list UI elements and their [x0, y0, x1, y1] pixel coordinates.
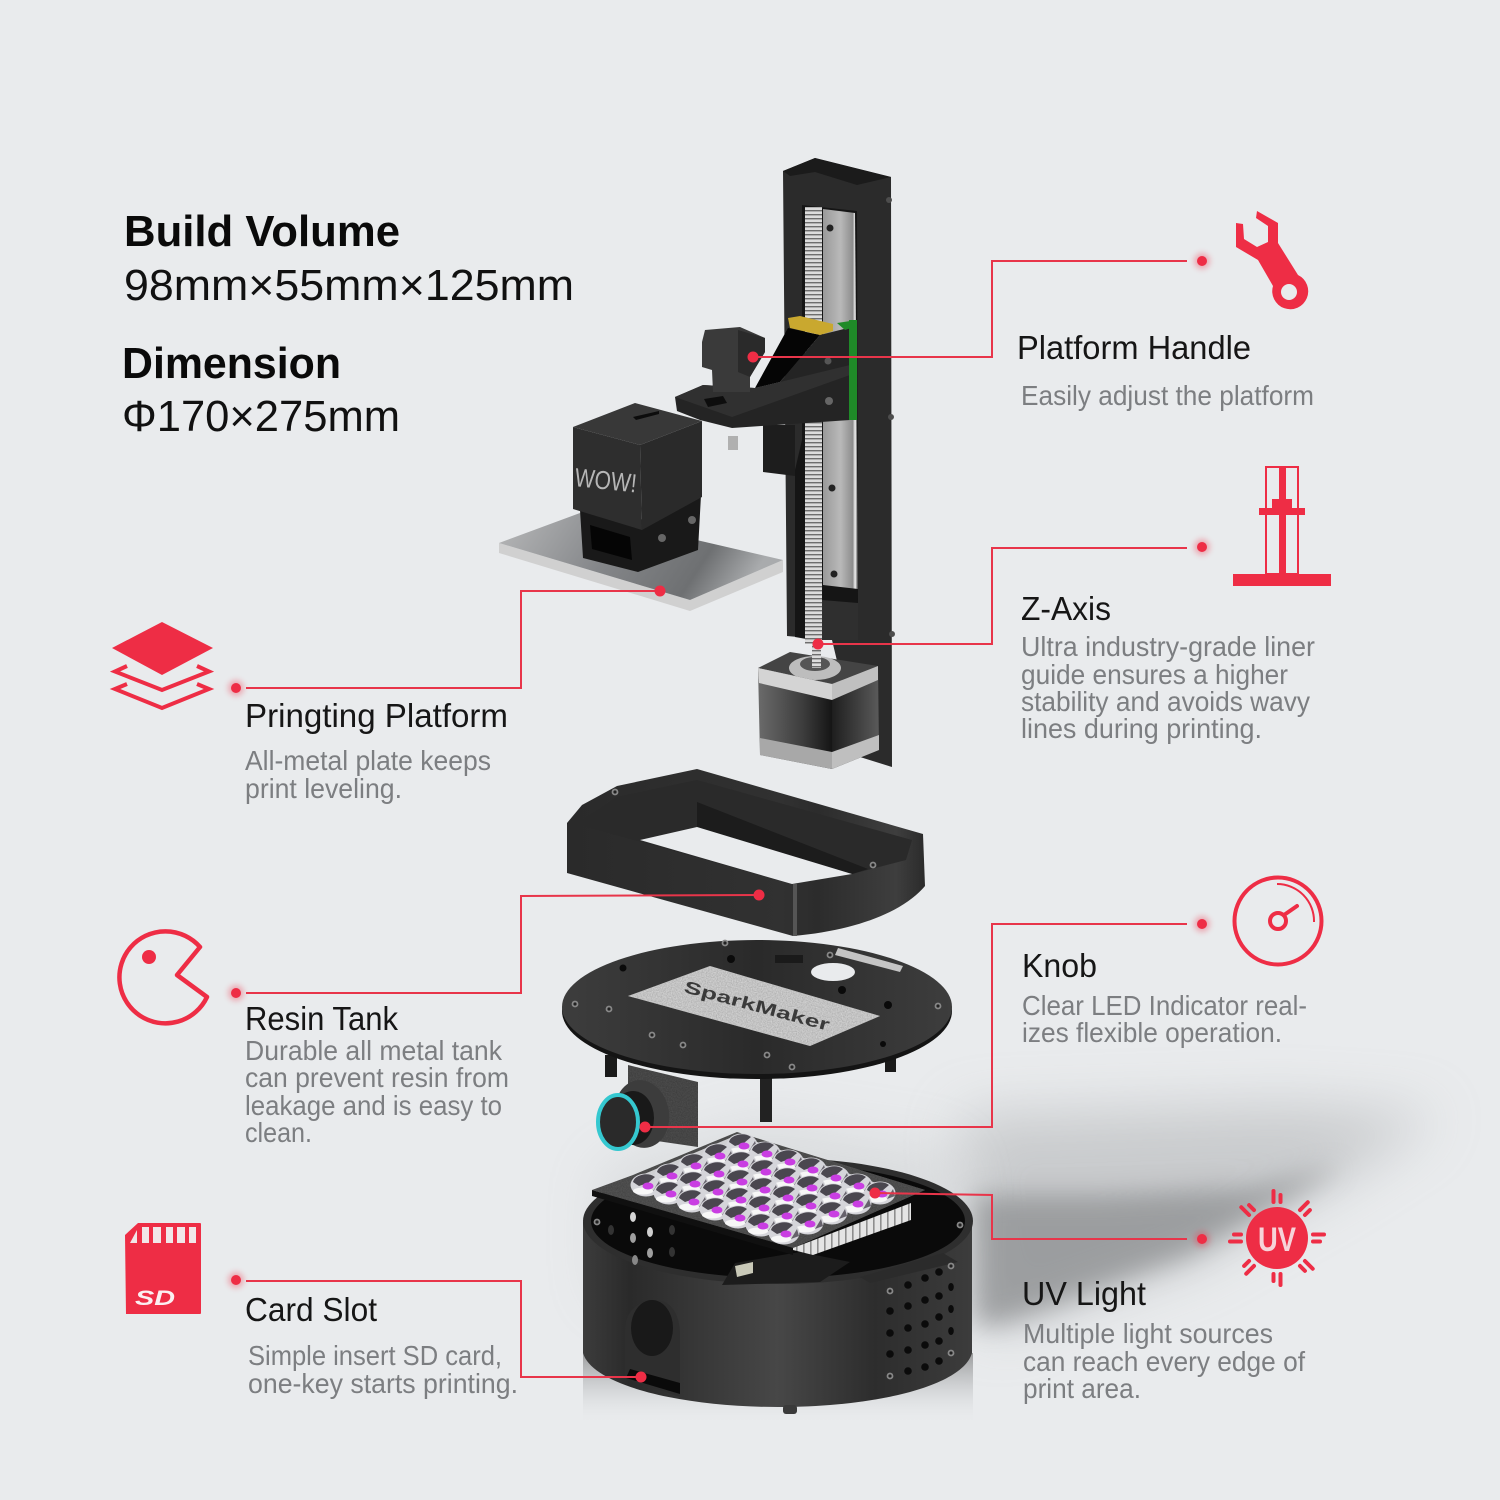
icon: SD card — [125, 1223, 201, 1314]
text: platform handle: Easily adjust the platform — [1021, 380, 1314, 411]
heading: dimension — [122, 339, 400, 441]
text: resin tank: leakage and is easy to — [245, 1090, 502, 1121]
heading: dimension: Φ170×275mm — [122, 392, 400, 441]
WOW box on platform — [573, 403, 702, 572]
text: UV light: Multiple light sources — [1023, 1318, 1273, 1349]
speaker holes on base — [886, 1263, 954, 1379]
text: z-axis — [1021, 590, 1315, 744]
text: z-axis: Z-Axis — [1021, 590, 1111, 627]
text: platform handle — [1017, 329, 1314, 411]
text: card slot: Simple insert SD card, — [248, 1340, 502, 1371]
text: printing platform: Pringting Platform — [245, 697, 508, 734]
base enclosure — [583, 1158, 973, 1414]
heading: build volume — [124, 207, 574, 310]
heading: dimension: Dimension — [122, 339, 341, 388]
icon: z-axis — [1233, 467, 1331, 586]
control disc with screen: SparkMaker — [682, 978, 832, 1035]
text: UV light: can reach every edge of — [1023, 1346, 1305, 1377]
callout connector: z-axis — [812, 539, 1210, 650]
icon: UV sun — [1230, 1191, 1324, 1285]
Z-axis column assembly — [783, 158, 895, 767]
callout connector: platform handle — [748, 253, 1210, 362]
text: UV light: UV Light — [1022, 1275, 1146, 1312]
text: knob: izes flexible operation. — [1022, 1017, 1282, 1048]
text: z-axis: guide ensures a higher — [1021, 659, 1288, 690]
icon: knob dial — [1234, 878, 1322, 964]
platform handle and arm — [675, 316, 857, 476]
text: z-axis: Ultra industry-grade liner — [1021, 631, 1315, 662]
text: resin tank: Resin Tank — [245, 1000, 398, 1037]
text: UV light — [1022, 1275, 1305, 1404]
icon: wrench — [1236, 211, 1308, 309]
text: platform handle: Platform Handle — [1017, 329, 1251, 366]
text: resin tank: Durable all metal tank — [245, 1035, 503, 1066]
text: UV light: print area. — [1023, 1373, 1141, 1404]
callout connector: UV light — [870, 1188, 1210, 1247]
text: resin tank: clean. — [245, 1117, 312, 1148]
stepper motor — [758, 640, 879, 769]
text: resin tank: can prevent resin from — [245, 1062, 509, 1093]
callout connector: knob — [640, 916, 1210, 1132]
icon: layers — [112, 622, 213, 708]
control disc with screen — [562, 940, 952, 1147]
text: card slot: Card Slot — [245, 1291, 377, 1328]
text: card slot — [245, 1291, 518, 1399]
text: knob: Knob — [1022, 947, 1097, 984]
resin tank — [567, 769, 925, 936]
heading: build volume: Build Volume — [124, 207, 400, 256]
icon: UV sun: UV — [1258, 1221, 1296, 1259]
callout connector: resin tank — [228, 890, 764, 1001]
text: printing platform: All-metal plate keeps — [245, 745, 491, 776]
WOW box on platform: WOW! — [573, 462, 638, 498]
text: z-axis: lines during printing. — [1021, 713, 1262, 744]
icon: SD card: SD — [135, 1287, 175, 1310]
text: resin tank — [245, 1000, 509, 1148]
text: card slot: one-key starts printing. — [248, 1368, 518, 1399]
text: printing platform: print leveling. — [245, 773, 402, 804]
text: knob — [1022, 947, 1307, 1048]
text: knob: Clear LED Indicator real- — [1022, 990, 1307, 1021]
callout connector: card slot — [228, 1272, 646, 1382]
knob with LED ring — [598, 1076, 674, 1152]
reflection below base — [583, 1353, 973, 1425]
icon: pac-man resin tank — [119, 931, 207, 1023]
heading: build volume: 98mm×55mm×125mm — [124, 261, 574, 310]
printing platform plate — [499, 513, 783, 611]
text: printing platform — [245, 697, 508, 804]
background shadow behind base — [600, 1105, 1440, 1335]
UV LED board — [592, 1132, 925, 1255]
text: z-axis: stability and avoids wavy — [1021, 686, 1310, 717]
callout connector: printing platform — [228, 586, 666, 696]
